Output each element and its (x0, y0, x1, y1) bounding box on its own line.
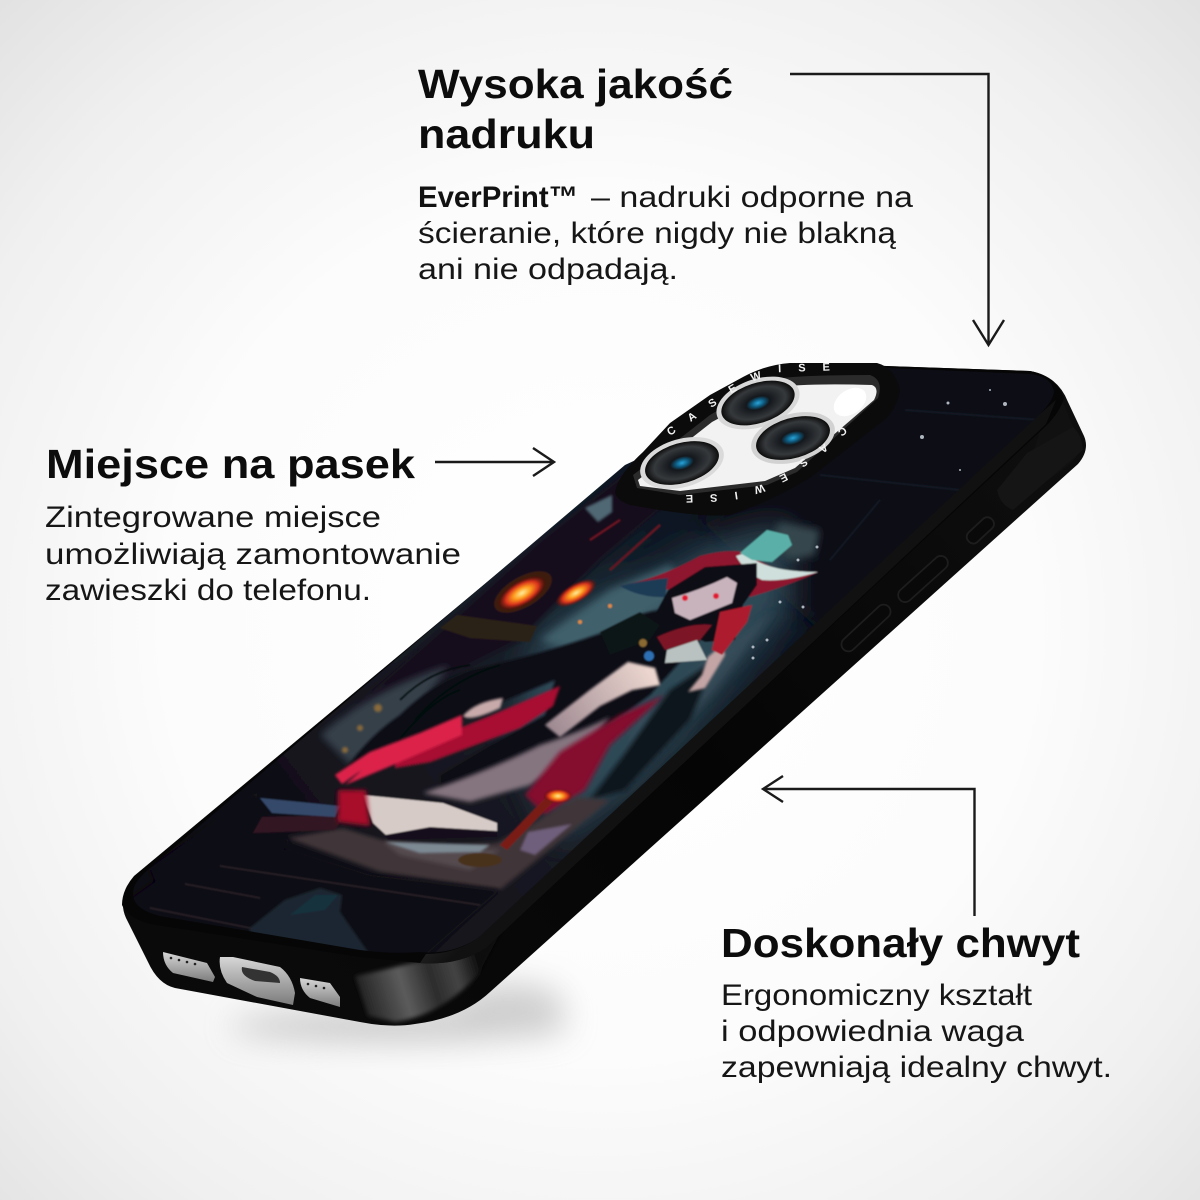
heading: Doskonały chwyt: Doskonały chwyt (721, 920, 1080, 966)
lamp left (494, 570, 552, 614)
red skirt (395, 686, 560, 768)
heading: Wysoka jakość nadruku (418, 61, 733, 157)
room left dark (357, 474, 660, 704)
red streaks (590, 520, 660, 570)
body text: grip: i odpowiednia waga (721, 1015, 1024, 1048)
speaker left (163, 952, 215, 982)
camera ring brand bottom: CASEWISE (686, 428, 846, 503)
teal oval behind hair (455, 675, 520, 702)
gem (639, 639, 654, 661)
lower dark foreground (130, 850, 500, 960)
heading: Miejsce na pasek: Miejsce na pasek (46, 441, 415, 487)
volume buttons (839, 515, 996, 654)
body text: grip: zapewniają idealny chwyt. (721, 1051, 1112, 1084)
hair and dark dress (345, 610, 700, 790)
camera window (633, 375, 880, 495)
body text: strap slot: zawieszki do telefonu. (45, 574, 371, 607)
body text: EverPrint: ani nie odpadają. (418, 253, 678, 286)
foreground ghost shape (250, 888, 370, 955)
sparkle stars (752, 389, 1007, 660)
camera glass white (638, 384, 877, 491)
plank lines (150, 866, 480, 930)
arrow: strap slot to phone (435, 448, 554, 476)
lamp right (556, 579, 596, 607)
rim edge band (420, 400, 1056, 963)
heading block: print quality (418, 61, 913, 286)
red glove (335, 715, 462, 785)
dark blouse (600, 612, 660, 655)
eye left (682, 595, 688, 601)
top dark sky (692, 408, 1014, 631)
gold clutter (458, 853, 502, 867)
dark right skirt (590, 664, 706, 799)
red sleeve (712, 605, 752, 655)
glass soft highlight (828, 382, 872, 422)
maroon book (253, 815, 345, 833)
camera ring brand top: CASEWISE (667, 363, 830, 434)
open book (363, 795, 497, 836)
lit chest and thigh (545, 662, 660, 737)
ghost inner (290, 895, 338, 915)
speaker right (300, 978, 340, 1007)
hat white band (736, 553, 818, 580)
ember glints (578, 604, 612, 624)
pale leg lower (423, 717, 610, 802)
bottom corner highlight (355, 917, 503, 1022)
eye right (713, 593, 719, 599)
body text: EverPrint: – nadruki odporne na (591, 181, 913, 214)
white collar (665, 640, 707, 663)
heading block: strap slot (45, 441, 461, 607)
left teal floor (320, 665, 450, 765)
candle (500, 795, 555, 850)
grey teal robe right (610, 626, 760, 792)
pale thigh (463, 698, 503, 718)
dark left shadow (150, 790, 290, 915)
back face artwork (133, 368, 1054, 952)
grey floor haze (383, 842, 500, 870)
side sheen (1020, 398, 1082, 500)
bumper rim (122, 364, 1064, 963)
heading: Wysoka jakość nadruku: Wysoka jakość (418, 61, 733, 107)
arm pale (688, 645, 725, 692)
heading block: grip (721, 920, 1112, 1084)
book blue cover (260, 798, 340, 817)
gold clutter left (342, 704, 382, 753)
teal mist band near hat (540, 565, 690, 650)
arrow: print quality to phone (790, 74, 1004, 345)
body text: EverPrint: EverPrint™ (418, 181, 578, 214)
usb port (220, 957, 295, 1005)
body text: grip: Ergonomiczny kształt (721, 979, 1033, 1012)
phone shadow (230, 983, 570, 1041)
teal mist (510, 525, 790, 840)
hat cone (740, 530, 792, 562)
body text: EverPrint: ścieranie, które nigdy nie blakną (418, 217, 896, 250)
purple cloth (520, 824, 572, 855)
hat brim blue end (620, 578, 668, 597)
water streak (385, 842, 490, 853)
lens top (710, 367, 806, 439)
book spine shade (385, 827, 497, 840)
phone case (122, 363, 1086, 1026)
smoke above hat (770, 522, 820, 560)
candle flame (544, 789, 572, 803)
lens left (634, 428, 730, 498)
window shelf (440, 615, 537, 642)
body text: strap slot (45, 501, 461, 607)
hair (653, 563, 757, 642)
face (672, 577, 737, 620)
beam lines (820, 410, 1040, 560)
hat brim (620, 551, 818, 597)
case body (123, 364, 1086, 1026)
body text: EverPrint (418, 181, 913, 286)
crimson lower robe (525, 695, 665, 815)
red embers (338, 790, 370, 826)
lens right (745, 403, 841, 473)
side switch (997, 427, 1083, 510)
heading: Wysoka jakość nadruku: nadruku (418, 111, 595, 157)
body text: grip (721, 979, 1112, 1084)
painting (133, 368, 1054, 952)
window detail (585, 495, 612, 522)
camera island (615, 363, 900, 516)
arrow: grip to phone side (763, 776, 974, 916)
body text: strap slot: umożliwiają zamontowanie (45, 538, 461, 571)
red cape on shoulder (657, 624, 712, 650)
hair strands (395, 665, 500, 745)
floor band (287, 797, 610, 890)
body text: strap slot: Zintegrowane miejsce (45, 501, 381, 534)
